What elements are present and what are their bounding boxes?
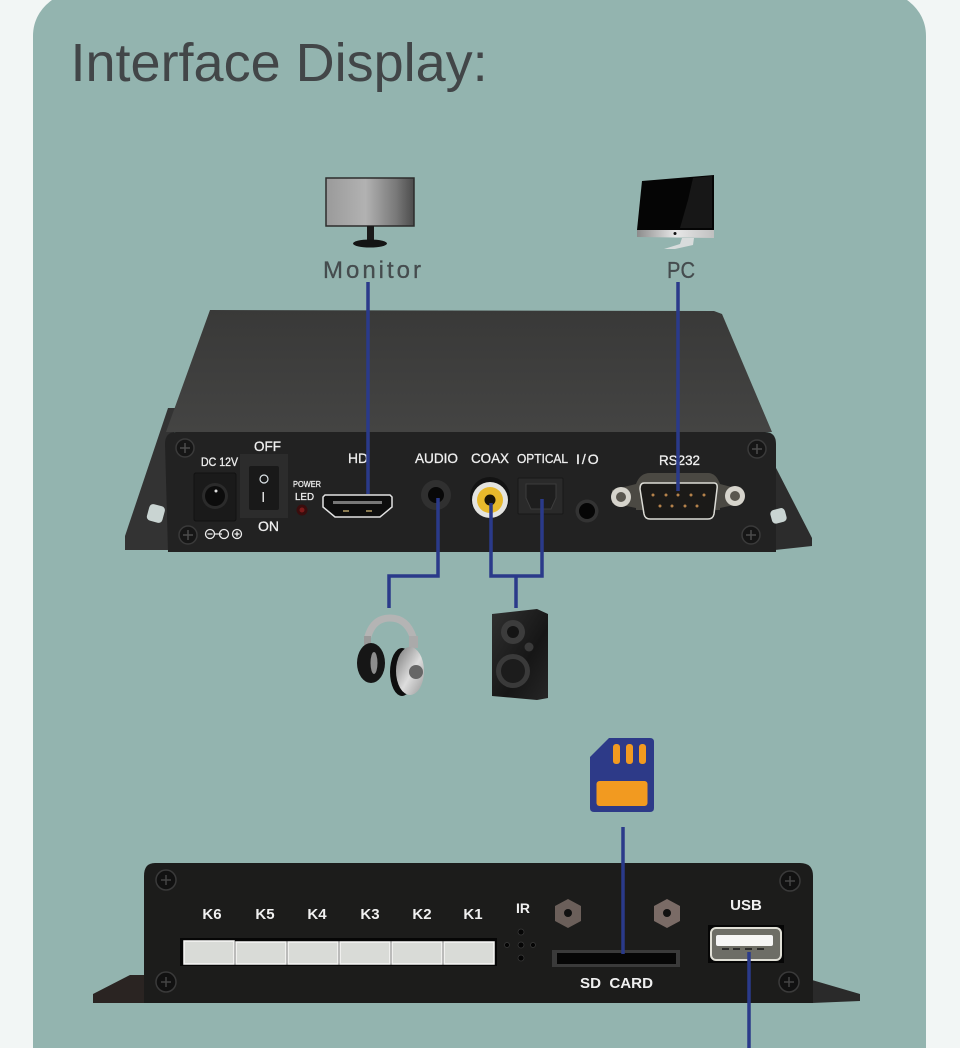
label: USB: USB bbox=[730, 897, 762, 914]
IR sensor holes bbox=[504, 929, 536, 961]
key labels K6 to K1: K4 bbox=[307, 906, 327, 923]
polarity symbol bbox=[206, 530, 242, 538]
title: Interface Display: bbox=[70, 33, 488, 93]
connector line: audio to headphones bbox=[389, 498, 438, 608]
left mounting flange bbox=[125, 408, 175, 550]
connector line: HDMI to monitor bbox=[366, 282, 370, 494]
power LED bbox=[296, 504, 308, 516]
label: Monitor: Monitor bbox=[323, 257, 421, 284]
label: HD: HD bbox=[348, 450, 368, 466]
power switch bbox=[240, 454, 288, 518]
label: POWER LED bbox=[293, 479, 321, 503]
right mounting flange bbox=[775, 466, 812, 550]
connector line: coax and optical to speaker bbox=[491, 499, 542, 608]
label: POWER LED: LED bbox=[295, 491, 314, 503]
I/O jack bbox=[576, 500, 598, 522]
device: front view with keys, SD and USB bbox=[93, 863, 860, 1003]
label: I/O: I/O bbox=[576, 451, 601, 467]
key labels K6 to K1: K2 bbox=[412, 906, 432, 923]
left flange bbox=[93, 975, 144, 1003]
optical port bbox=[518, 478, 563, 514]
connector line: USB port bbox=[747, 952, 751, 1048]
connector line: SD slot to SD card bbox=[621, 827, 625, 954]
mounting holes bbox=[146, 503, 788, 525]
key labels K6 to K1: K6 bbox=[202, 906, 222, 923]
key labels K6 to K1 bbox=[202, 906, 483, 923]
icon: monitor bbox=[326, 178, 414, 248]
key labels K6 to K1: K3 bbox=[360, 906, 380, 923]
audio jack bbox=[421, 480, 451, 510]
coax RCA port bbox=[470, 477, 510, 518]
front plate bbox=[144, 863, 813, 1003]
device: rear view with AV ports bbox=[125, 310, 812, 552]
label: ON: ON bbox=[258, 519, 279, 534]
label: POWER LED: POWER bbox=[293, 479, 321, 489]
label: IR: IR bbox=[516, 900, 530, 916]
key connectors bbox=[180, 938, 497, 966]
icon: headphones bbox=[357, 618, 424, 696]
screws bbox=[156, 870, 800, 992]
label: DC 12V: DC 12V bbox=[201, 457, 238, 469]
label: COAX: COAX bbox=[471, 451, 509, 466]
SD card slot bbox=[552, 950, 680, 967]
label: RS232: RS232 bbox=[659, 453, 700, 468]
HDMI port bbox=[323, 495, 392, 517]
label: OFF: OFF bbox=[254, 439, 281, 454]
DC jack bbox=[194, 473, 236, 521]
top cover bbox=[166, 310, 772, 432]
key labels K6 to K1: K5 bbox=[255, 906, 275, 923]
icon: speaker bbox=[492, 609, 548, 700]
key labels K6 to K1: K1 bbox=[463, 906, 483, 923]
label: OPTICAL: OPTICAL bbox=[517, 451, 568, 466]
connector line: RS232 to PC bbox=[676, 282, 680, 491]
screws bbox=[176, 439, 766, 544]
label: PC: PC bbox=[667, 257, 695, 283]
label: SD CARD: SD CARD bbox=[580, 975, 653, 992]
front face bbox=[165, 432, 776, 552]
label: AUDIO: AUDIO bbox=[415, 451, 458, 466]
right flange bbox=[812, 980, 860, 1003]
icon: PC bbox=[637, 175, 714, 249]
RS232 DB9 connector bbox=[611, 473, 745, 519]
USB port bbox=[708, 925, 784, 963]
standoff nuts bbox=[555, 899, 680, 928]
icon: SD card bbox=[590, 738, 654, 812]
